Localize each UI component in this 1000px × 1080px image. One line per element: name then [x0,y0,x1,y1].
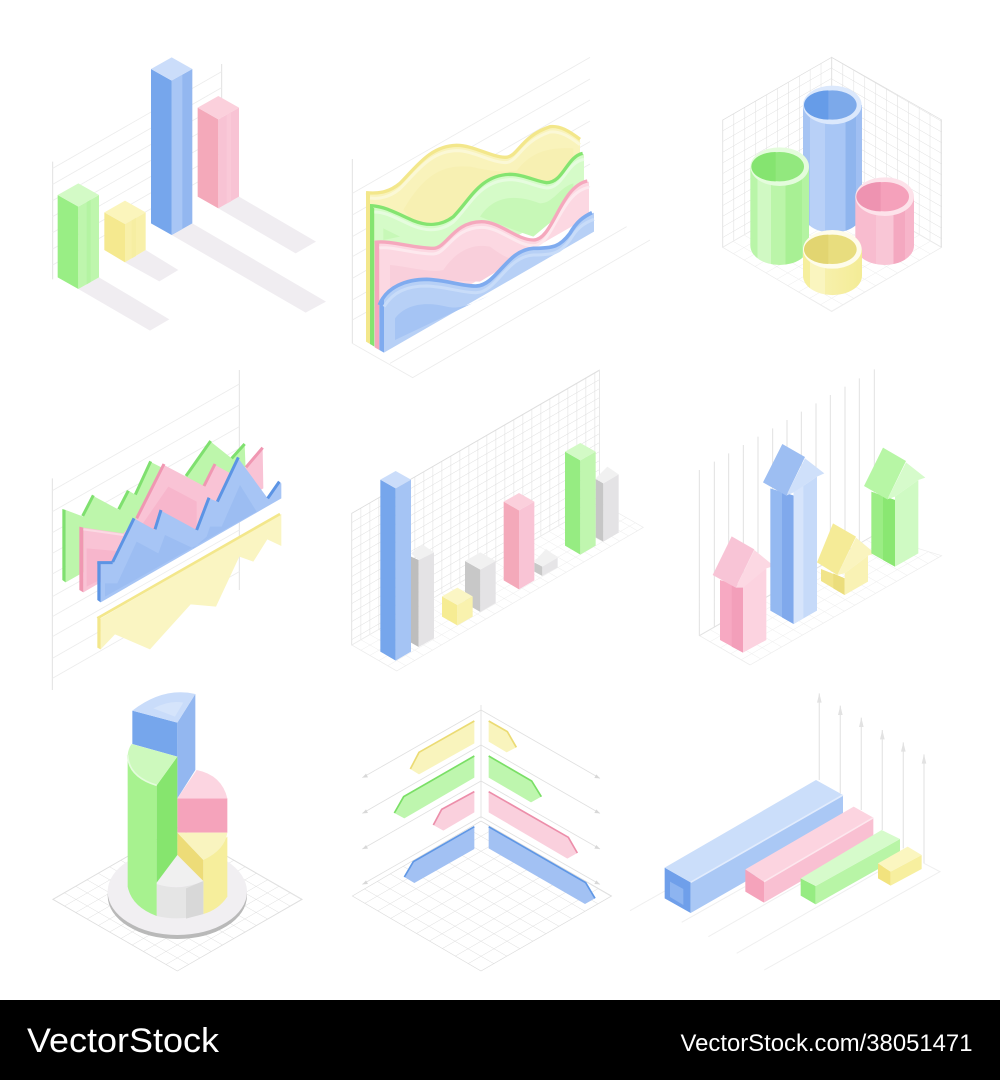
green arrow [864,448,925,567]
green cylinder [750,147,809,265]
chart 2: layered wave area chart [352,57,650,378]
yellow wave layer [366,126,580,344]
pink jagged layer [79,448,263,592]
grey bar 2 [465,552,496,612]
yellow arrow [817,523,875,595]
green bar [565,443,596,555]
blue jagged layer [97,457,281,602]
chart 3: cylinders in a grid corner [723,57,942,312]
pink wave layer [375,181,589,350]
green bar [58,183,99,289]
bar shadows [78,197,326,331]
yellow cube [442,588,473,625]
yellow short bar [878,847,922,886]
yellow bar [104,201,146,262]
chart 6: upward arrows [699,369,942,665]
chart 5 grid wall and floor [352,370,643,671]
green bars [394,756,541,818]
footer band [0,1000,1000,1080]
blue wave layer [379,213,594,353]
chart 3 grid walls and floor [723,57,942,312]
yellow slice [177,833,227,914]
blue long bar [665,780,843,913]
chart 8 floor and axes [352,705,612,971]
yellow cylinder [803,230,862,295]
chart 1: isometric bars with floor shadows [53,57,326,331]
chart 5: bar chart on grid wall [352,370,643,671]
green slice [128,744,177,916]
chart 2 grid lines [352,57,650,378]
yellow jagged layer [97,514,281,649]
pink arrow [713,536,774,653]
yellow bars [410,721,516,774]
footer logo text: VectorStock [27,1022,220,1060]
grey bar 3 [596,467,619,542]
footer image id text: VectorStock.com/38051471 [680,1030,972,1057]
pink bar [198,96,239,208]
chart 1 grid lines [53,64,222,279]
grey slice [157,855,203,919]
green long bar [801,830,900,904]
blue arrow [763,444,824,624]
blue bars [404,827,595,904]
pink slice [177,770,227,833]
grey small bar [534,549,558,576]
chart 9 axes and arrows [630,693,940,970]
pink cylinder [855,177,914,265]
blue cylinder [803,86,862,233]
pink long bar [745,807,873,903]
grey bar 1 [411,544,434,647]
chart 7: stacked pie column on disc [53,692,302,971]
pink bars [433,792,577,859]
chart 4: jagged area chart layers [52,370,281,690]
chart 6 grid [699,369,942,665]
blue bar [380,471,411,661]
pink bar [504,493,534,589]
chart 8: mirrored bars on grid [352,705,612,971]
blue bar [151,57,192,235]
green wave layer [370,153,584,347]
base disc [108,848,247,939]
chart 9: horizontal isometric bars [630,693,940,970]
chart 7 floor grid [53,828,302,971]
blue slice [132,692,195,798]
chart 4 grid lines [52,370,239,690]
green jagged layer [62,441,246,582]
